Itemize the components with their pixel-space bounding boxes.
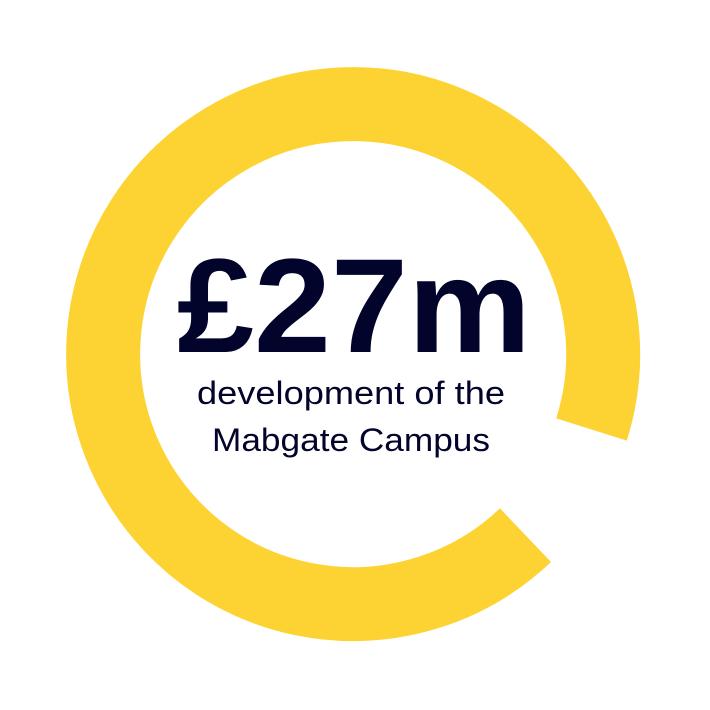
description text [197, 375, 505, 458]
progress ring [103, 104, 603, 604]
description text: development of the [197, 375, 505, 411]
description text: Mabgate Campus [212, 422, 490, 458]
headline value: £27m [177, 232, 531, 381]
